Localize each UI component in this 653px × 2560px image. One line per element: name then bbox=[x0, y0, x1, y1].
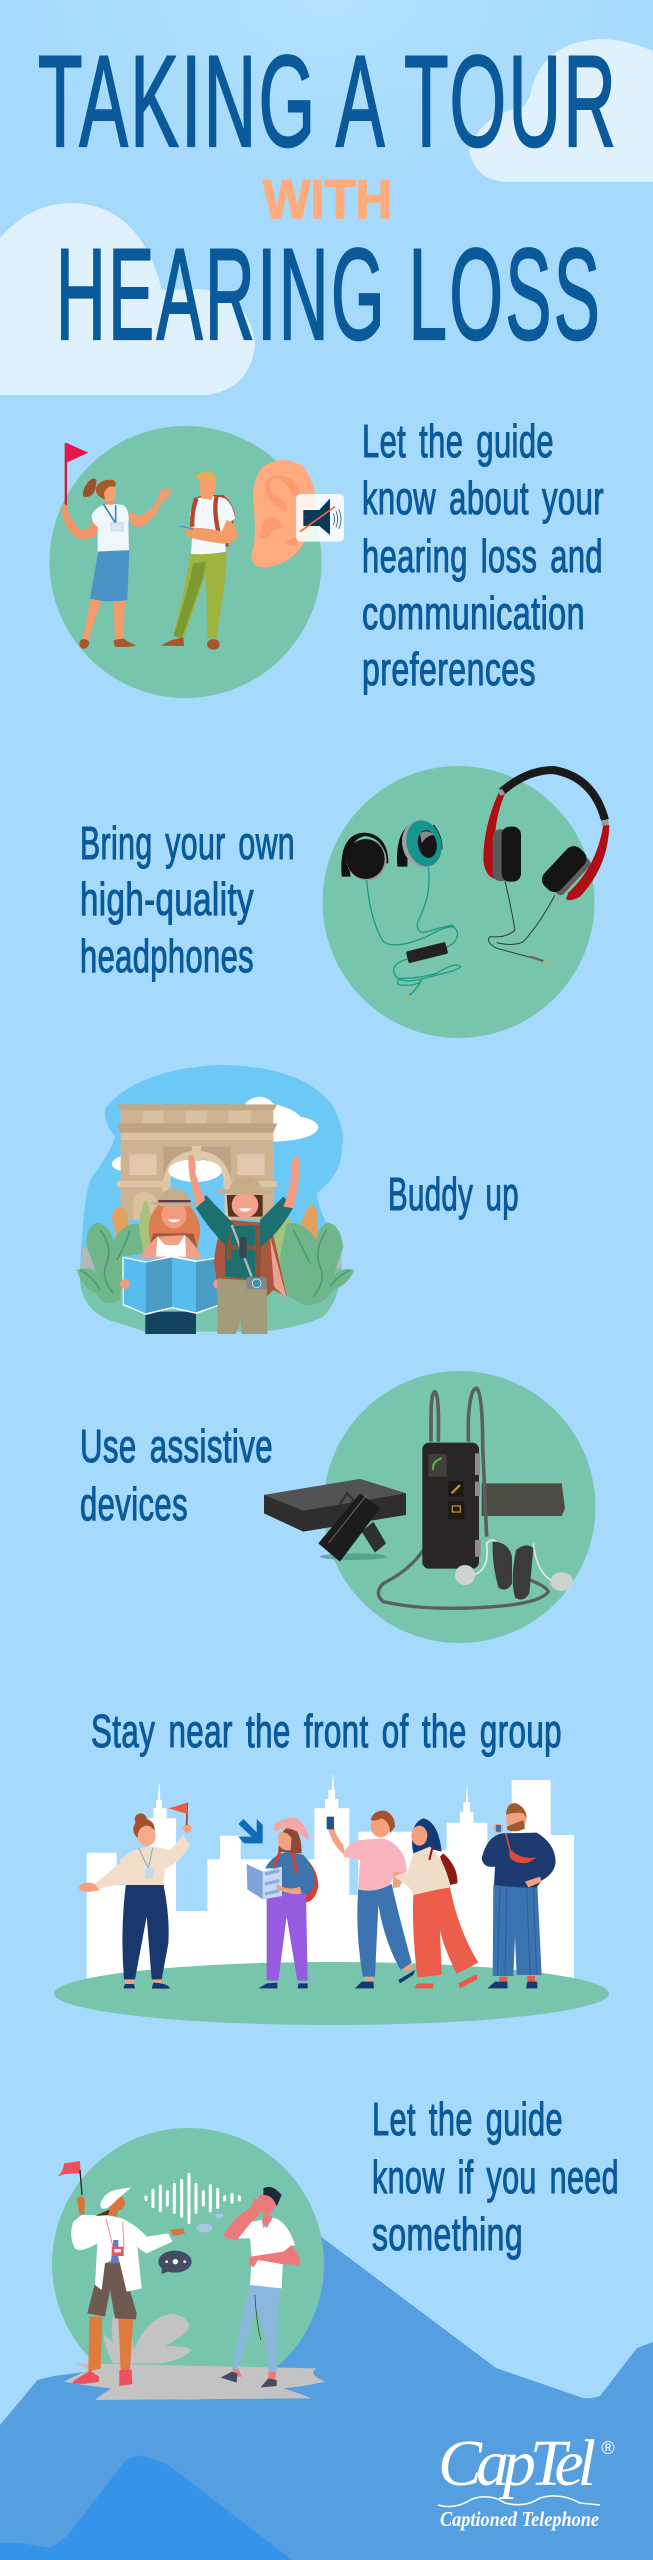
icon: hearing aids bbox=[455, 1540, 573, 1600]
icon: dark speech bubble bbox=[158, 2251, 192, 2274]
title: HEARING LOSS bbox=[56, 223, 600, 368]
panel: assistive devices illustration bbox=[264, 1371, 596, 1643]
panel: headphones illustration bbox=[322, 766, 609, 1038]
panel: buddy up illustration bbox=[77, 1065, 354, 1334]
text: tip 4: devices bbox=[80, 1478, 188, 1530]
text: tip 4 bbox=[80, 1420, 273, 1530]
clouds bbox=[112, 1097, 318, 1171]
icon: small blue speech bubbles bbox=[196, 2214, 224, 2232]
man with backpack bbox=[161, 472, 238, 650]
mountain: mid blue bbox=[0, 2215, 653, 2560]
text: tip 1: Let the guide bbox=[362, 415, 554, 467]
panel: ask the guide illustration bbox=[52, 2128, 325, 2400]
text: tip 6: something bbox=[372, 2208, 523, 2260]
logo: CapTel: CapTel bbox=[438, 2427, 596, 2500]
cloud: left bbox=[0, 203, 255, 395]
woman with map bbox=[120, 1188, 223, 1334]
icon: TV box and microphone bbox=[264, 1479, 406, 1562]
icon: teal clip headphones bbox=[341, 816, 461, 999]
city skyline bbox=[87, 1775, 574, 1985]
icon: red flag bbox=[65, 443, 88, 512]
sky blob bbox=[80, 1065, 343, 1268]
icon: charger tray bbox=[482, 1483, 565, 1516]
ground bbox=[80, 1267, 342, 1332]
text: tip 6: Let the guide bbox=[372, 2093, 563, 2145]
icon: sound wave bbox=[146, 2174, 239, 2223]
icon: red over-ear headphones bbox=[483, 770, 609, 965]
man calling out bbox=[221, 2187, 300, 2387]
title: TAKING A TOUR bbox=[38, 30, 616, 174]
text: tip 2 bbox=[80, 817, 295, 982]
icon: blue arrow bbox=[238, 1819, 263, 1843]
plants bbox=[77, 1200, 354, 1305]
ground and bush bbox=[64, 2313, 325, 2400]
text: tip 1: preferences bbox=[362, 643, 536, 695]
text: tip 3: Buddy up bbox=[388, 1168, 519, 1220]
man with beard bbox=[482, 1803, 556, 1988]
icon: streamer device bbox=[378, 1388, 548, 1608]
text: tip 2: Bring your own bbox=[80, 817, 295, 869]
icon: muted speaker bbox=[296, 494, 344, 542]
arch monument bbox=[117, 1104, 277, 1220]
logo: CapTel bbox=[438, 2427, 615, 2531]
title bbox=[38, 30, 616, 368]
title: WITH bbox=[263, 168, 392, 230]
icon: ear bbox=[252, 460, 315, 567]
woman with backpack bbox=[393, 1818, 478, 1988]
man taking selfie bbox=[327, 1811, 415, 1988]
man with raised arms bbox=[188, 1155, 300, 1334]
text: tip 4: Use assistive bbox=[80, 1420, 273, 1472]
logo: CapTel: Captioned Telephone bbox=[440, 2507, 599, 2531]
ground ellipse bbox=[54, 1962, 609, 2025]
logo: CapTel: ® bbox=[601, 2438, 615, 2458]
tourist with map bbox=[247, 1818, 318, 1988]
text: tip 6 bbox=[372, 2093, 619, 2260]
guide in white coat bbox=[57, 2161, 185, 2386]
panel: tour group illustration bbox=[54, 1775, 609, 2025]
text: tip 1 bbox=[362, 415, 604, 695]
woman guide bbox=[62, 479, 174, 649]
mountain: dark blue bbox=[0, 2456, 292, 2560]
rocks bbox=[80, 1245, 342, 1268]
text: tip 2: headphones bbox=[80, 930, 254, 982]
cloud: upper right bbox=[469, 39, 653, 182]
guide with flag bbox=[78, 1803, 192, 1989]
panel: tell the guide illustration bbox=[50, 426, 344, 698]
text: tip 2: high-quality bbox=[80, 873, 254, 925]
